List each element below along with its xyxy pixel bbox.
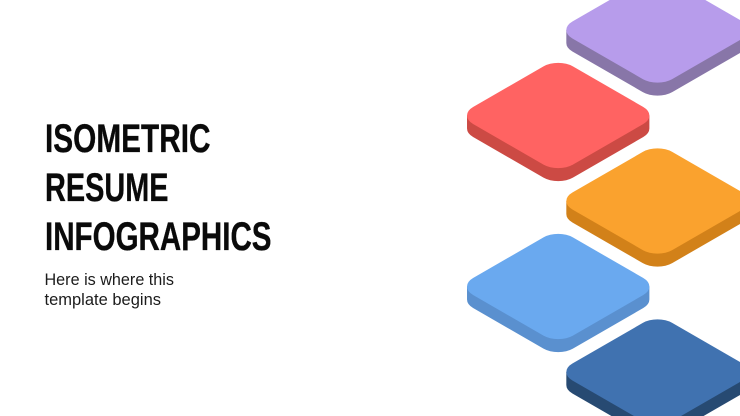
isometric tile: dark blue (566, 319, 740, 416)
isometric tile: orange (566, 148, 740, 267)
subtitle (44, 271, 174, 309)
title (45, 117, 272, 259)
subtitle: Here is where this (44, 271, 174, 289)
isometric tile: purple (566, 0, 740, 96)
title: INFOGRAPHICS (45, 215, 272, 259)
isometric tile: red (467, 63, 649, 181)
title: RESUME (45, 166, 168, 210)
isometric tile: light blue (467, 234, 649, 352)
title: ISOMETRIC (45, 117, 210, 161)
subtitle: template begins (44, 291, 161, 309)
